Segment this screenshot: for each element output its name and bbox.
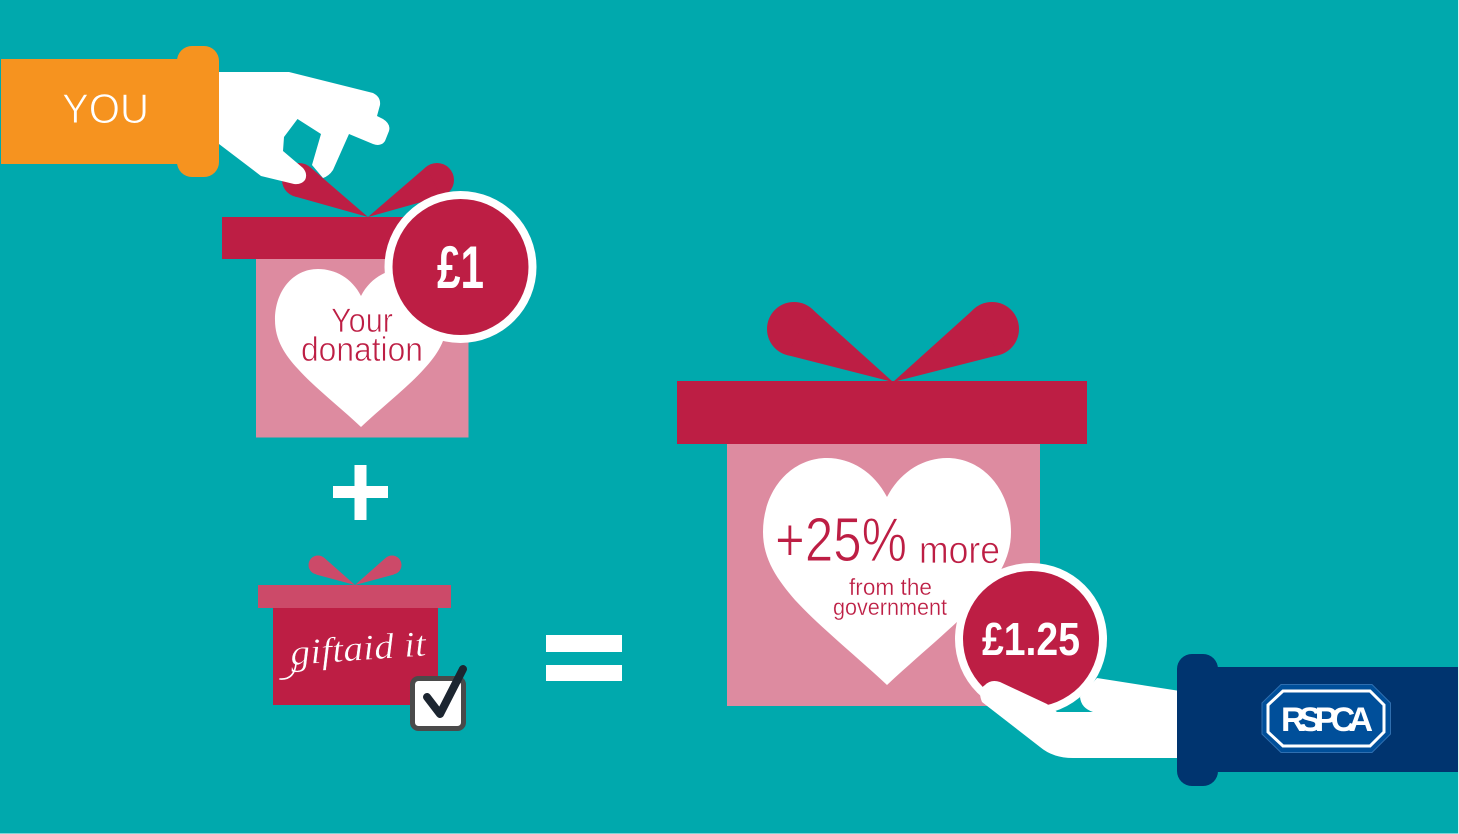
giftaid it logo text: giftaid it [289,624,428,673]
heart text: your donation [301,302,423,369]
box lid [222,217,502,259]
plus sign [333,465,388,520]
heart text: +25% more from the government [775,506,1000,620]
heart text: +25% more from the government: from the [849,574,932,600]
box lid [677,381,1087,444]
heart [275,269,447,427]
hand: giving donation [219,72,389,184]
checkbox icon [412,669,464,728]
box body [727,444,1040,706]
heart text: your donation: donation [301,331,423,369]
box body [273,608,438,705]
result badge: £1.25 [955,563,1107,715]
heart text: +25% more from the government: government [833,594,948,620]
small gift box: your donation [222,163,502,438]
ribbon bow [308,556,402,585]
small gift box: gift aid [258,556,464,728]
large gift box: with gift aid [677,302,1087,706]
hand: receiving donation [980,678,1180,758]
you sleeve [1,46,219,177]
result badge: £1.25: £1.25 [982,613,1080,665]
box lid [258,585,451,608]
ribbon bow [282,163,454,217]
label: you: YOU [62,85,149,132]
donation badge: £1: £1 [437,234,484,301]
heart text: +25% more from the government: more [919,530,1000,572]
heart [763,458,1011,685]
donation badge: £1 [384,191,536,343]
heart text: +25% more from the government: +25% [775,506,907,575]
box body [256,259,468,438]
equals sign [546,635,622,681]
ribbon bow [767,302,1019,382]
heart text: your donation: Your [331,302,393,340]
rspca logo: RSPCA [1281,701,1373,739]
rspca sleeve [1177,654,1458,786]
rspca logo [1262,684,1390,752]
